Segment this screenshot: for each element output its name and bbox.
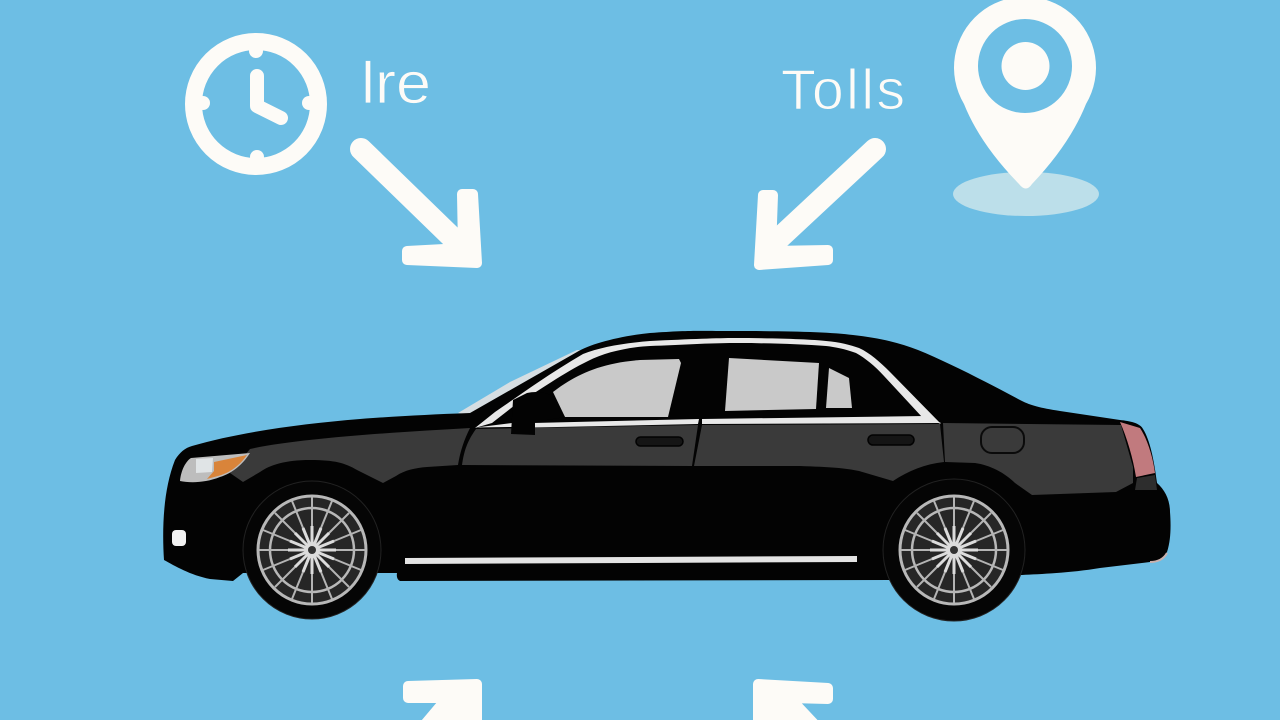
label: tolls: Tolls xyxy=(781,58,905,122)
car rear door panel xyxy=(694,424,944,481)
car small rear panel xyxy=(1135,475,1157,490)
icon: location pin xyxy=(953,0,1099,216)
arrow: top right xyxy=(759,149,875,265)
car body xyxy=(163,331,1171,581)
car quarter window xyxy=(826,368,852,408)
car sill chrome xyxy=(405,556,857,564)
car chrome trim xyxy=(475,338,941,428)
arrow: bottom right xyxy=(758,684,828,720)
car front window xyxy=(553,359,681,417)
car front fender panel xyxy=(230,428,470,483)
car fuel door xyxy=(981,427,1024,453)
front wheel xyxy=(243,481,381,619)
car rear window xyxy=(725,358,819,411)
rear wheel xyxy=(883,479,1025,621)
car windshield xyxy=(458,350,585,415)
car side mirror xyxy=(511,392,565,435)
car belt line chrome xyxy=(476,416,941,428)
car headlight xyxy=(180,453,250,482)
icon: clock xyxy=(194,42,318,166)
label: time: lre xyxy=(361,51,431,116)
car tail light xyxy=(1120,422,1155,477)
car fog light xyxy=(172,530,186,546)
car door handles xyxy=(636,435,914,446)
arrow: top left xyxy=(361,149,477,263)
arrow: bottom left xyxy=(408,684,477,720)
car xyxy=(163,331,1171,621)
car rear bumper edge xyxy=(1150,553,1167,562)
car front door panel xyxy=(462,425,698,466)
car quarter panel xyxy=(943,423,1133,495)
